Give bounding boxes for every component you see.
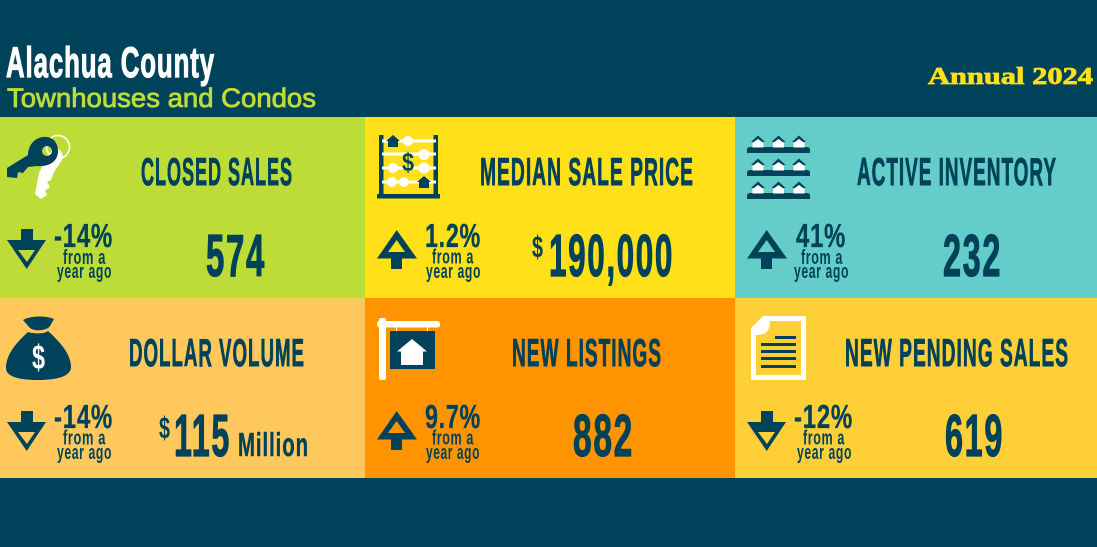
icon: up arrow bbox=[747, 230, 787, 269]
change: 41% bbox=[796, 217, 846, 254]
panel: new listings bbox=[365, 298, 735, 478]
change: from a bbox=[803, 426, 845, 450]
panel: active inventory bbox=[735, 117, 1097, 298]
change: year ago bbox=[797, 441, 852, 464]
icon: for sale sign bbox=[377, 318, 440, 380]
change: -14% bbox=[54, 217, 113, 254]
icon: up arrow bbox=[377, 230, 417, 269]
icon: abacus: $ bbox=[402, 147, 414, 177]
change: year ago bbox=[426, 260, 481, 283]
change: year ago bbox=[426, 441, 480, 464]
value: 190,000 bbox=[549, 223, 674, 289]
change: from a bbox=[63, 246, 106, 269]
change: from a bbox=[63, 426, 106, 450]
change: year ago bbox=[794, 260, 849, 283]
change: year ago bbox=[57, 441, 112, 464]
value bbox=[159, 403, 309, 469]
change: from a bbox=[432, 426, 474, 450]
value: 619 bbox=[945, 403, 1004, 469]
icon: abacus bbox=[377, 135, 440, 198]
value: 882 bbox=[573, 403, 634, 469]
value: 232 bbox=[943, 223, 1002, 289]
change: from a bbox=[432, 246, 474, 268]
period label: Annual 2024 bbox=[928, 64, 1093, 90]
change: from a bbox=[801, 246, 843, 269]
value: 574 bbox=[206, 223, 266, 289]
change: 9.7% bbox=[425, 398, 481, 435]
change: -14% bbox=[54, 398, 113, 435]
value: $ bbox=[159, 410, 170, 445]
change: year ago bbox=[57, 260, 112, 283]
change bbox=[794, 217, 849, 283]
value: $ bbox=[532, 229, 543, 264]
change bbox=[54, 398, 113, 464]
icon: up arrow bbox=[377, 411, 417, 450]
panel: median sale price: MEDIAN SALE PRICE bbox=[480, 151, 694, 194]
panel: closed sales bbox=[0, 117, 365, 298]
icon: document bbox=[751, 316, 806, 380]
value bbox=[532, 223, 674, 289]
change: -12% bbox=[794, 398, 853, 435]
change bbox=[425, 398, 481, 464]
icon: down arrow bbox=[7, 411, 46, 451]
change bbox=[794, 398, 853, 464]
icon: down arrow bbox=[7, 229, 46, 269]
change: 1.2% bbox=[425, 217, 481, 254]
panel: new pending sales bbox=[735, 298, 1097, 478]
subtitle: Townhouses and Condos bbox=[7, 83, 316, 113]
panel: new listings: NEW LISTINGS bbox=[512, 332, 662, 375]
change bbox=[425, 217, 481, 283]
panel: closed sales: CLOSED SALES bbox=[141, 151, 293, 194]
header bbox=[6, 39, 1093, 113]
change bbox=[54, 217, 113, 283]
panel: dollar volume: DOLLAR VOLUME bbox=[129, 332, 305, 375]
icon: money bag bbox=[6, 316, 71, 380]
panel: median sale price bbox=[365, 117, 735, 298]
icon: houses on shelves bbox=[747, 136, 810, 199]
value: 115 bbox=[174, 403, 231, 469]
title: Alachua County bbox=[6, 39, 215, 87]
icon: down arrow bbox=[747, 411, 786, 451]
value: Million bbox=[238, 426, 309, 463]
icon: keys bbox=[7, 136, 70, 199]
icon: money bag: $ bbox=[32, 339, 45, 377]
panel: dollar volume bbox=[0, 298, 365, 478]
